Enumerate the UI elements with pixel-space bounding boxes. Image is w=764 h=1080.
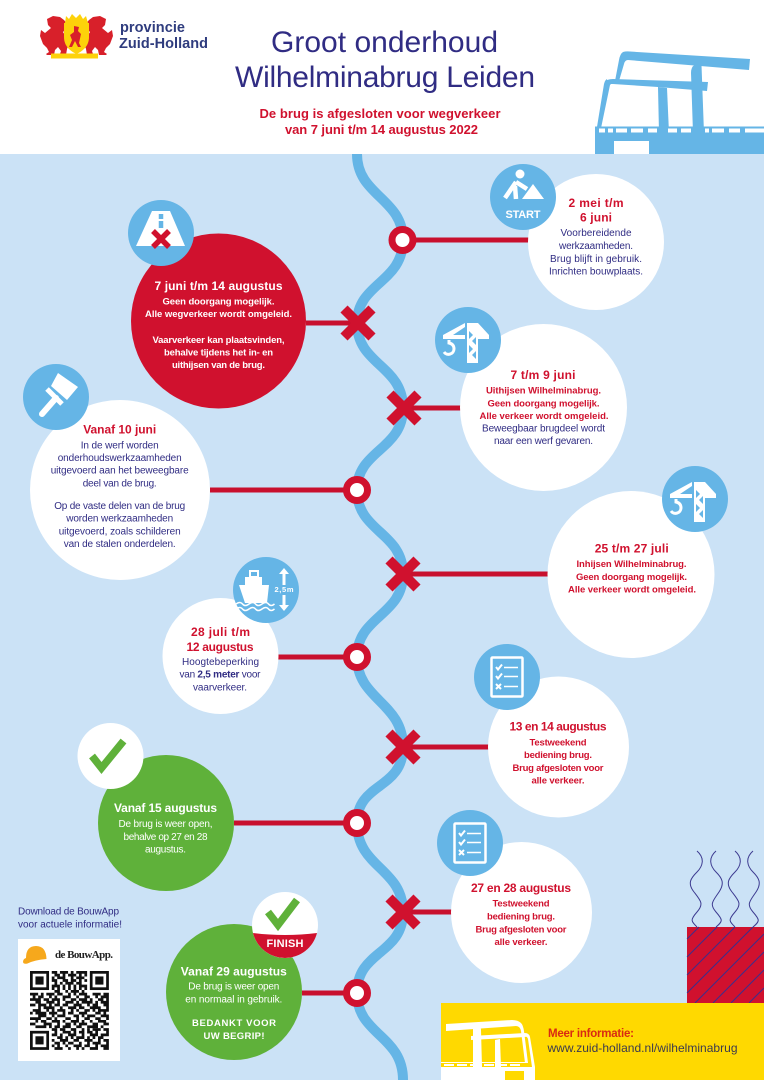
marker cross: 27 en 28 augustus bbox=[389, 898, 417, 926]
panel: 7 juni t/m 14 augustus bbox=[128, 200, 306, 408]
marker cross: 7 t/m 9 juni bbox=[390, 394, 418, 422]
text: uitgevoerd aan het beweegbare bbox=[51, 466, 189, 477]
text: van 2,5 meter voor bbox=[180, 670, 261, 681]
text: bediening brug. bbox=[524, 750, 592, 761]
text: augustus. bbox=[145, 844, 186, 855]
text: uithijsen van de brug. bbox=[172, 360, 265, 371]
marker ring: start bbox=[392, 230, 413, 250]
logo: provincie Zuid-Holland bbox=[40, 14, 208, 58]
text: BEDANKT VOOR bbox=[192, 1018, 276, 1029]
text: Alle verkeer wordt omgeleid. bbox=[568, 584, 696, 595]
download text: voor actuele informatie! bbox=[18, 919, 122, 930]
download text: Download de BouwApp bbox=[18, 907, 119, 918]
subtitle: van 7 juni t/m 14 augustus 2022 bbox=[285, 122, 478, 137]
marker ring: 28 juli bbox=[346, 646, 368, 668]
text: Voorbereidende bbox=[560, 228, 632, 239]
text: uitgevoerd, zoals schilderen bbox=[59, 526, 181, 537]
text: Uithijsen Wilhelminabrug. bbox=[486, 386, 601, 397]
timeline: river bbox=[357, 154, 403, 1080]
text: vaarverkeer. bbox=[193, 682, 247, 693]
text: 13 en 14 augustus bbox=[510, 720, 607, 734]
decoration: wavy steam lines bbox=[690, 851, 759, 927]
text: Vanaf 15 augustus bbox=[114, 801, 217, 815]
text bbox=[51, 423, 189, 550]
text: behalve op 27 en 28 bbox=[124, 832, 208, 843]
icon: helmet bbox=[23, 946, 46, 964]
subtitle bbox=[260, 106, 500, 137]
panel: vanaf 10 juni bbox=[23, 364, 210, 580]
text: Vaarverkeer kan plaatsvinden, bbox=[152, 335, 284, 346]
text: onderhoudswerkzaamheden bbox=[58, 453, 182, 464]
text: alle verkeer. bbox=[494, 937, 548, 948]
text bbox=[549, 196, 643, 278]
text: Vanaf 10 juni bbox=[83, 423, 156, 437]
marker ring: vanaf 10 juni bbox=[346, 480, 368, 500]
text: 25 t/m 27 juli bbox=[595, 542, 669, 556]
text: alle verkeer. bbox=[532, 776, 584, 787]
text: 12 augustus bbox=[186, 640, 254, 654]
bouwapp promo bbox=[18, 907, 122, 1061]
text: Geen doorgang mogelijk. bbox=[576, 572, 687, 583]
text bbox=[568, 542, 696, 595]
marker cross: 13 en 14 augustus bbox=[389, 733, 417, 761]
panel: 27 en 28 augustus bbox=[437, 810, 592, 983]
timeline connectors bbox=[210, 240, 550, 993]
icon: paint brush bbox=[23, 364, 89, 430]
download text bbox=[18, 907, 122, 930]
panel: 7 t/m 9 juni bbox=[435, 307, 627, 491]
icon: checklist bbox=[474, 644, 540, 710]
text: Vanaf 29 augustus bbox=[181, 964, 287, 978]
text bbox=[145, 279, 292, 371]
text bbox=[180, 625, 261, 693]
icon: finish check: FINISH bbox=[266, 938, 304, 950]
panel: vanaf 29 augustus bbox=[166, 892, 318, 1060]
illustration: white bridge bbox=[441, 1020, 535, 1080]
panel: vanaf 15 augustus bbox=[78, 723, 234, 891]
text: Brug afgesloten voor bbox=[512, 763, 604, 774]
text: 28 juli t/m bbox=[191, 625, 250, 639]
text: 7 juni t/m 14 augustus bbox=[154, 279, 283, 293]
text bbox=[181, 964, 287, 1042]
illustration: bridge bbox=[595, 51, 764, 154]
text: Hoogtebeperking bbox=[182, 657, 259, 668]
panel: 28 juli t/m 12 augustus bbox=[162, 557, 299, 714]
text: more info bbox=[546, 1028, 738, 1055]
subtitle: De brug is afgesloten voor wegverkeer bbox=[260, 106, 500, 121]
text: Alle wegverkeer wordt omgeleid. bbox=[145, 309, 292, 320]
text: In de werf worden bbox=[81, 440, 159, 452]
coat of arms bbox=[40, 14, 113, 58]
marker ring: vanaf 29 augustus bbox=[346, 982, 368, 1004]
header bbox=[0, 0, 764, 154]
QR code bbox=[30, 972, 109, 1049]
de BouwApp wordmark: de BouwApp. bbox=[55, 949, 113, 961]
icon: finish check bbox=[252, 892, 318, 958]
text: en normaal in gebruik. bbox=[185, 994, 282, 1005]
text: Inrichten bouwplaats. bbox=[549, 266, 643, 278]
text: 7 t/m 9 juni bbox=[510, 368, 576, 382]
timeline markers bbox=[344, 230, 418, 1004]
logo wordmark: Zuid-Holland bbox=[119, 36, 208, 52]
logo wordmark: provincie bbox=[120, 20, 185, 36]
text: 27 en 28 augustus bbox=[471, 881, 571, 895]
text: Alle verkeer wordt omgeleid. bbox=[480, 411, 608, 422]
icon: road closed bbox=[128, 200, 194, 266]
marker ring: vanaf 15 augustus bbox=[346, 812, 368, 834]
text: deel van de brug. bbox=[83, 478, 157, 489]
text: 6 juni bbox=[580, 210, 612, 224]
text: Beweegbaar brugdeel wordt bbox=[482, 424, 605, 435]
icon: crane bbox=[662, 466, 728, 532]
text: De brug is weer open, bbox=[118, 819, 212, 830]
text: Inhijsen Wilhelminabrug. bbox=[576, 559, 686, 570]
title: Groot onderhoud bbox=[271, 26, 498, 59]
text: naar een werf gevaren. bbox=[494, 436, 593, 447]
text bbox=[114, 801, 217, 855]
panel: meer informatie bbox=[441, 1003, 764, 1080]
text: worden werkzaamheden bbox=[65, 514, 173, 525]
text: De brug is weer open bbox=[188, 981, 279, 992]
icon: ship height limit bbox=[233, 557, 299, 623]
title: Wilhelminabrug Leiden bbox=[235, 61, 535, 94]
marker cross: 7 juni bbox=[344, 309, 372, 337]
decoration: red hatched block bbox=[687, 927, 764, 1003]
logo wordmark bbox=[119, 20, 208, 52]
text bbox=[480, 368, 608, 447]
panel: 25 t/m 27 juli bbox=[548, 466, 728, 658]
panel: 2 mei t/m 6 juni bbox=[490, 164, 664, 310]
text: Brug afgesloten voor bbox=[476, 924, 567, 935]
text: bediening brug. bbox=[487, 911, 555, 922]
text: Op de vaste delen van de brug bbox=[54, 501, 185, 512]
marker cross: 25 t/m 27 juli bbox=[389, 560, 417, 588]
text: Testweekend bbox=[492, 899, 550, 910]
text: Geen doorgang mogelijk. bbox=[488, 399, 600, 410]
icon: check mark bbox=[78, 723, 144, 789]
text: 2 mei t/m bbox=[568, 196, 624, 210]
text: Geen doorgang mogelijk. bbox=[162, 296, 274, 308]
text: werkzaamheden. bbox=[558, 241, 633, 252]
icon: worker START bbox=[490, 164, 556, 230]
text: more info: Meer informatie: bbox=[548, 1028, 634, 1040]
icon: crane bbox=[435, 307, 501, 373]
title bbox=[235, 26, 535, 94]
icon: checklist bbox=[437, 810, 503, 876]
text bbox=[471, 881, 571, 948]
text: Brug blijft in gebruik. bbox=[550, 254, 642, 265]
text: more info: www.zuid-holland.nl/wilhelminabrug bbox=[546, 1041, 738, 1055]
QR card bbox=[18, 939, 120, 1061]
panel: 13 en 14 augustus bbox=[474, 644, 629, 818]
text: Testweekend bbox=[530, 737, 587, 748]
icon: worker START: START bbox=[506, 209, 541, 221]
text bbox=[510, 720, 607, 787]
text: UW BEGRIP! bbox=[204, 1031, 264, 1042]
icon: ship height limit: 2,5m bbox=[274, 585, 294, 594]
text: van de stalen onderdelen. bbox=[64, 539, 176, 550]
text: behalve tijdens het in- en bbox=[164, 348, 273, 358]
